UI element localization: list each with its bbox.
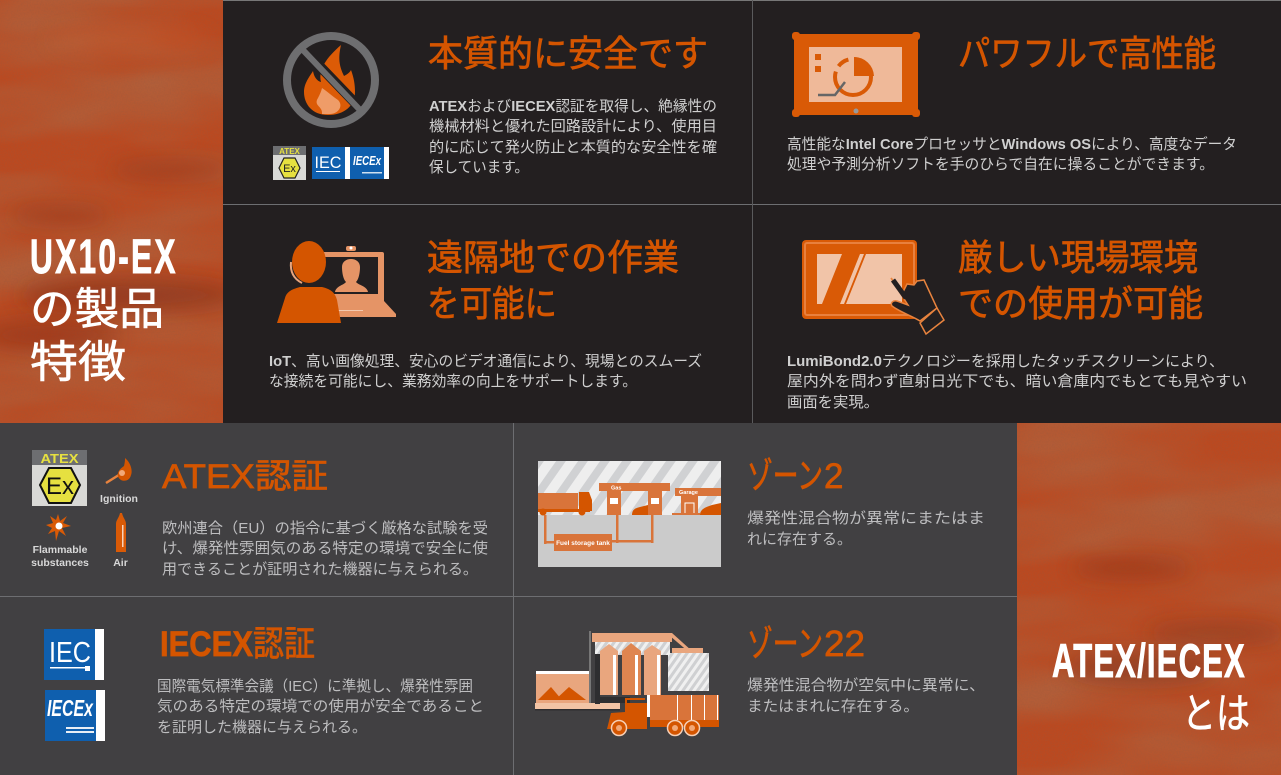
text: IECEX description: を証明した機器に与えられる。	[157, 719, 367, 736]
text: IECEX description: 気のある特定の環境での使用が安全であること	[157, 698, 484, 715]
heading: zone 2: 2	[824, 457, 843, 496]
heading: intrinsically safe: 本質的に安全です	[428, 33, 708, 74]
text: zone 2 description: れに存在する。	[747, 531, 852, 548]
heading: zone 2: ゾーン	[747, 455, 823, 496]
illustration: gas station over fuel tank: Garage	[679, 490, 698, 496]
icon: tablet with chart	[792, 32, 920, 117]
icon: IEC and IECEx badges small	[312, 147, 389, 179]
illustration: gas station over fuel tank: Fuel storage tank	[556, 540, 610, 547]
icon: IECEx logo: IECEx	[47, 695, 94, 721]
heading: harsh environments: 厳しい現場環境	[958, 237, 1198, 278]
text: zone 2 description: 爆発性混合物が異常にまたはま	[747, 510, 985, 527]
heading: zone 22: ゾーン	[747, 623, 823, 664]
panel: intrinsically safe	[273, 33, 717, 180]
panel: IECEX certification	[44, 625, 484, 741]
icon: IECEx logo	[45, 690, 105, 741]
panel: grey certification background	[0, 423, 1017, 775]
text: harsh environments description: 画面を実現。	[787, 394, 879, 411]
icon: ATEX badge small: ATEX	[279, 147, 301, 156]
icon: no fire	[287, 36, 375, 124]
panel: textured product features sidebar	[0, 0, 240, 423]
text: zone 22 description	[747, 677, 985, 715]
heading: IECEX certification: IECEX認証	[160, 625, 315, 664]
icon: ATEX badge large: ATEX	[40, 451, 79, 466]
panel: harsh environments	[787, 237, 1247, 411]
panel: dark feature background	[223, 0, 1281, 423]
text: remote work description	[269, 352, 702, 390]
panel: textured ATEX/IECEX sidebar	[1017, 423, 1281, 775]
text: harsh environments description: 屋内外を問わず直射日光下でも、暗い倉庫内でもとても見やすい	[787, 373, 1247, 390]
icon: ignition match	[106, 458, 132, 483]
text: IECEX description	[157, 677, 484, 736]
panel: powerful performance	[787, 32, 1237, 173]
heading: ATEX certification: ATEX認証	[162, 458, 328, 496]
label: air: Air	[113, 557, 128, 569]
icon: IEC logo: IEC	[49, 637, 91, 669]
heading: harsh environments: での使用が可能	[958, 283, 1203, 324]
heading: what is ATEX/IECEX	[1052, 636, 1250, 737]
icon: ATEX badge small	[273, 146, 306, 180]
text: zone 22 description: 爆発性混合物が空気中に異常に、	[747, 677, 985, 694]
text: remote work description: IoT、高い画像処理、安心のビデオ通信により、現場とのスムーズ	[269, 352, 702, 370]
illustration: gas station over fuel tank: Gas	[611, 486, 621, 492]
icon: air cylinder	[116, 513, 126, 552]
text: harsh environments description	[787, 353, 1247, 411]
text: ATEX description: け、爆発性雰囲気のある特定の環境で安全に使	[162, 540, 488, 557]
heading: UX10-EX product features: UX10-EX	[30, 229, 178, 284]
icon: ATEX badge large	[32, 450, 87, 506]
icon: IEC logo	[44, 629, 104, 680]
heading: remote work	[427, 237, 679, 324]
label: flammable substances	[31, 544, 89, 569]
icon: video call on laptop	[277, 241, 396, 323]
heading: UX10-EX product features	[30, 229, 178, 387]
heading: harsh environments	[958, 237, 1203, 324]
text: intrinsically safe description	[429, 98, 717, 176]
heading: powerful performance: パワフルで高性能	[958, 33, 1216, 74]
panel: zone 2	[538, 455, 985, 567]
text: intrinsically safe description: ATEXおよびIECEX認証を取得し、絶縁性の	[429, 98, 717, 115]
text: intrinsically safe description: 的に応じて発火防止と本質的な安全性を確	[429, 138, 717, 156]
illustration: silos and truck	[535, 631, 719, 736]
icon: IEC and IECEx badges small: IECEx	[353, 153, 382, 168]
heading: what is ATEX/IECEX: ATEX/IECEX	[1052, 636, 1246, 688]
heading: UX10-EX product features: 特徴	[30, 338, 126, 387]
panel: ATEX certification	[31, 450, 488, 578]
icon: flammable burst	[46, 514, 71, 541]
heading: zone 22: 22	[824, 623, 865, 664]
label: ignition: Ignition	[100, 493, 138, 505]
heading: UX10-EX product features: の製品	[30, 285, 164, 334]
icon: ATEX badge large: Ex	[46, 473, 74, 500]
text: ATEX description: 欧州連合（EU）の指令に基づく厳格な試験を受	[162, 520, 488, 537]
heading: remote work: 遠隔地での作業	[427, 237, 679, 278]
icon: IEC and IECEx badges small: IEC	[314, 153, 342, 172]
text: ATEX description	[162, 520, 488, 578]
text: zone 2 description	[747, 510, 985, 548]
text: powerful performance description: 高性能なIntel CoreプロセッサとWindows OSにより、高度なデータ	[787, 135, 1237, 153]
icon: ATEX badge small: Ex	[283, 163, 296, 175]
text: powerful performance description	[787, 135, 1237, 173]
text: remote work description: な接続を可能にし、業務効率の向上をサポートします。	[269, 373, 637, 390]
text: powerful performance description: 処理や予測分析ソフトを手のひらで自在に操ることができます。	[787, 156, 1214, 173]
text: intrinsically safe description: 保しています。	[429, 159, 529, 176]
icon: touch tablet with hand	[802, 240, 944, 334]
text: zone 22 description: またはまれに存在する。	[747, 698, 919, 715]
text: harsh environments description: LumiBond2.0テクノロジーを採用したタッチスクリーンにより、	[787, 353, 1224, 370]
text: IECEX description: 国際電気標準会議（IEC）に準拠し、爆発性雰囲	[157, 677, 473, 695]
text: intrinsically safe description: 機械材料と優れた回路設計により、使用目	[429, 118, 717, 135]
panel: zone 22	[535, 623, 985, 736]
heading: what is ATEX/IECEX: とは	[1182, 690, 1250, 737]
text: ATEX description: 用できることが証明された機器に与えられる。	[162, 561, 478, 578]
illustration: gas station over fuel tank	[538, 461, 721, 567]
label: flammable substances: substances	[31, 557, 89, 569]
heading: remote work: を可能に	[427, 283, 557, 324]
panel: remote work	[269, 237, 702, 390]
label: flammable substances: Flammable	[33, 544, 88, 556]
